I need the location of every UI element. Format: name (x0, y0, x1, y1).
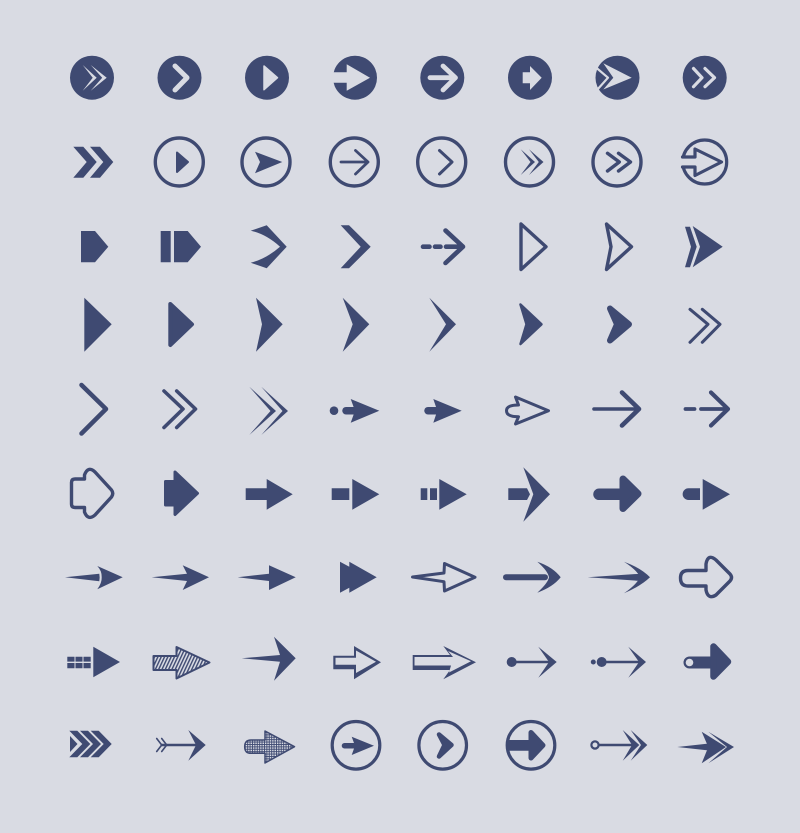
icon: dashed arrow (423, 230, 463, 263)
icon: solid circle cut arrow (332, 56, 377, 100)
icon: two squares and triangle (421, 479, 467, 510)
icon: block arrow (246, 479, 293, 510)
icon: outlined capsule arrow (680, 557, 732, 597)
icon: taper shaft curved head (588, 562, 650, 593)
icon: dot line arrow (507, 647, 557, 678)
icon: double tapered chevron (249, 387, 288, 435)
icon: crosshatched arrow (245, 731, 294, 763)
icon: double thin chevron (690, 309, 720, 342)
icon: outlined circle thin double chevron (506, 138, 554, 186)
icon: rounded notched arrowhead (520, 304, 542, 344)
icon: outlined circle notched arrow (242, 138, 290, 186)
icon: outline dart arrow (506, 397, 548, 424)
icon: outlined circle dart arrow (332, 722, 380, 769)
icon: rounded triangle (170, 304, 192, 345)
icon: fletched thin arrow (157, 730, 206, 761)
icon: taper shaft gapped head (65, 566, 123, 589)
icon: outlined circle line arrow (330, 138, 378, 186)
icon: solid circle double chevron (683, 56, 727, 100)
icon: line arrow (594, 392, 639, 426)
icon: double triangle (340, 562, 377, 593)
icon: solid circle notched arrow with chevron (596, 56, 640, 100)
icon: taper shaft block head (238, 565, 296, 590)
icon: fat rounded chevron (610, 308, 629, 340)
icon: bar and large notched head (508, 467, 550, 522)
icon: chevron and notched arrow (685, 226, 723, 267)
icon: taper shaft swept head (242, 637, 296, 681)
icon: solid circle line arrow (420, 56, 464, 100)
icon: bar and triangle arrow (332, 479, 379, 510)
icon: solid circle block arrow (508, 56, 552, 100)
icon: grid and triangle arrow (67, 647, 120, 677)
icon: deep notched triangle (343, 298, 369, 352)
icon: outlined circle double chevron (593, 138, 641, 186)
icon: capsule and triangle (683, 479, 730, 510)
icon: triangle (84, 298, 112, 352)
icon: thick shaft curved head (506, 562, 561, 593)
icon: taper shaft notched head (152, 565, 209, 590)
icon: double rounded chevron (164, 391, 196, 428)
icon: ring line double head arrow (591, 730, 647, 761)
icon: thick rounded arrow (599, 479, 638, 508)
icon: outlined circle with outline arrow (678, 140, 727, 184)
icon: outlined circle fat chevron (419, 722, 467, 769)
icon: double solid chevron (73, 147, 113, 178)
icon: outlined kite (606, 224, 632, 270)
icon: triple chevron (69, 731, 112, 757)
icon: outline long arrow (412, 564, 475, 591)
icon: curved chevron (251, 225, 287, 268)
icon: solid rounded block arrow (166, 472, 198, 514)
icon: capsule with hole block arrow (684, 646, 728, 676)
icon: solid circle chevron (158, 56, 202, 100)
icon: band chevron (341, 225, 371, 268)
icon: long outline arrow with shadow (413, 646, 476, 679)
icon: bar and pentagon (161, 231, 201, 262)
icon: notched triangle (256, 298, 283, 352)
icon: pentagon (81, 231, 108, 262)
icon: outline arrow with shadow (333, 646, 381, 679)
icon: slim notched arrowhead (429, 298, 456, 352)
icon: solid circle thin double chevron (70, 56, 114, 100)
icon: outlined triangle (521, 224, 546, 270)
icon: large line chevron (82, 385, 106, 434)
icon: taper shaft double head arrow (677, 732, 734, 763)
icon: outlined circle play (155, 138, 203, 186)
icon: outlined circle cutting arrow (507, 722, 555, 769)
icon: short rounded arrow (428, 399, 462, 423)
icon: hatched block arrow (154, 647, 210, 678)
icon: big outlined rounded arrow (72, 469, 113, 517)
icon: solid circle play (245, 56, 289, 100)
icon: outlined circle chevron (418, 138, 466, 186)
icon: dashed line arrow (686, 392, 728, 426)
icon: two dots line arrow (591, 647, 646, 678)
icon: dot and arrow (330, 399, 379, 423)
